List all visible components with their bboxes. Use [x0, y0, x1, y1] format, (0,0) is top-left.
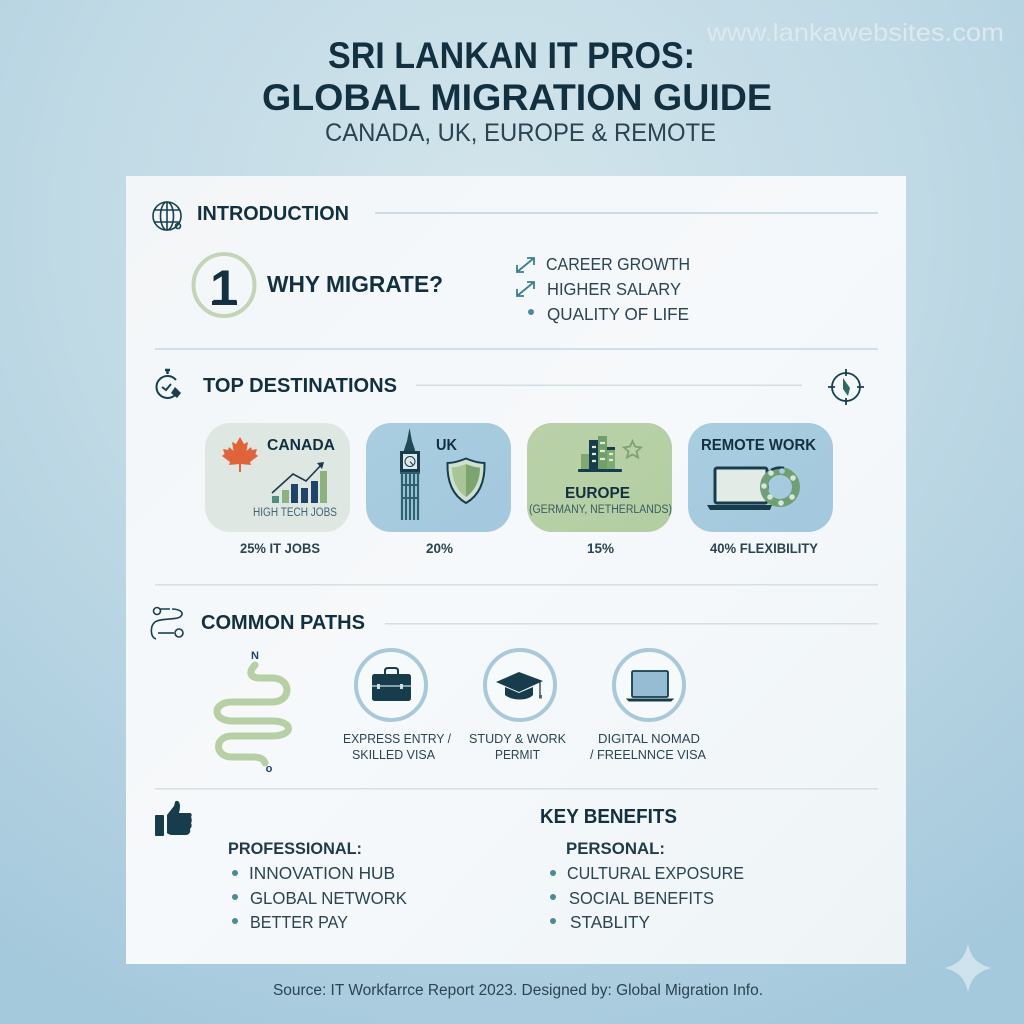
stat: canada: 25% IT JOBS: [240, 541, 320, 556]
list: reasons: HIGHER SALARY: [547, 279, 681, 299]
icon: graduation cap: [496, 672, 543, 700]
icon: laptop: [627, 671, 673, 701]
caption: STUDY & WORK: [469, 732, 567, 746]
heading: why migrate: WHY MIGRATE?: [267, 271, 443, 297]
footer source: Source: IT Workfarrce Report 2023. Designed by: Global Migration Info.: [273, 982, 763, 999]
heading: common paths: COMMON PATHS: [201, 612, 365, 634]
heading: top destinations: TOP DESTINATIONS: [203, 375, 397, 397]
winding road: o: [266, 763, 273, 775]
list: reasons: CAREER GROWTH: [546, 254, 690, 274]
icon: big ben: [400, 428, 420, 520]
list: professional: [228, 839, 407, 932]
icon: star: [624, 441, 641, 458]
caption: DIGITAL NOMAD: [598, 732, 700, 746]
list: personal: CULTURAL EXPOSURE: [567, 863, 744, 883]
label: REMOTE WORK: [701, 437, 816, 454]
bullet: [528, 309, 534, 315]
watermark: www.lankawebsites.com: [706, 19, 1004, 47]
icon: shield: [447, 458, 485, 503]
caption: HIGH TECH JOBS: [253, 507, 337, 519]
card: europe: [527, 423, 672, 532]
card: remote work: [688, 423, 833, 532]
stat: uk: 20%: [426, 541, 453, 556]
icon: maple leaf: [222, 437, 258, 472]
list: personal: PERSONAL:: [566, 839, 665, 858]
section: top destinations: [157, 369, 864, 556]
path: express entry: SKILLED VISA: [352, 748, 436, 762]
list: reasons: [517, 254, 690, 324]
title: SRI LANKAN IT PROS:: [328, 35, 695, 76]
list: professional: INNOVATION HUB: [249, 863, 395, 883]
path: express entry: [343, 650, 452, 762]
card: uk: [366, 423, 511, 532]
title: [262, 35, 772, 118]
list: personal: SOCIAL BENEFITS: [569, 888, 714, 908]
list: reasons: QUALITY OF LIFE: [547, 304, 689, 324]
section: introduction: [153, 202, 878, 324]
section: common paths: [151, 608, 878, 775]
panel: main card: [126, 176, 906, 964]
icon: laptop: [707, 468, 772, 510]
path: digital nomad: [590, 650, 707, 762]
path: study and work: [469, 650, 567, 762]
list: personal: STABLITY: [570, 912, 650, 932]
icon: briefcase: [372, 668, 411, 701]
icon: city buildings: [578, 436, 622, 472]
label: UK: [436, 437, 457, 454]
icon: compass: [828, 369, 864, 405]
heading: introduction: INTRODUCTION: [197, 203, 349, 225]
icon: globe: [153, 202, 181, 230]
icon: thumbs up: [155, 801, 192, 836]
icon: sparkle: [944, 944, 992, 992]
path: digital nomad: / FREELNNCE VISA: [590, 748, 707, 762]
icon: arrow: [517, 282, 534, 296]
icon: stopwatch: [157, 370, 181, 398]
number badge: 1: [210, 260, 238, 316]
card: canada: [205, 423, 350, 532]
chart: growth bars: [272, 462, 327, 503]
label: CANADA: [267, 437, 335, 454]
icon: arrow: [517, 258, 534, 272]
label: EUROPE: [565, 485, 630, 502]
section: key benefits: [155, 801, 744, 932]
list: professional: GLOBAL NETWORK: [250, 888, 407, 908]
list: personal: [550, 839, 744, 932]
stat: remote work: 40% FLEXIBILITY: [710, 541, 818, 556]
number badge: [194, 254, 254, 316]
list: professional: BETTER PAY: [250, 912, 348, 932]
path: study and work: PERMIT: [495, 748, 540, 762]
heading: key benefits: KEY BENEFITS: [540, 806, 677, 828]
caption: (GERMANY, NETHERLANDS): [529, 504, 672, 516]
icon: ring of nodes: [761, 468, 796, 506]
list: professional: PROFESSIONAL:: [228, 839, 362, 858]
winding road: [217, 650, 288, 775]
caption: EXPRESS ENTRY /: [343, 732, 452, 746]
subtitle: CANADA, UK, EUROPE & REMOTE: [325, 119, 716, 147]
title: GLOBAL MIGRATION GUIDE: [262, 77, 772, 118]
stat: europe: 15%: [587, 541, 614, 556]
winding road: N: [251, 650, 259, 662]
icon: paths: [151, 608, 183, 639]
